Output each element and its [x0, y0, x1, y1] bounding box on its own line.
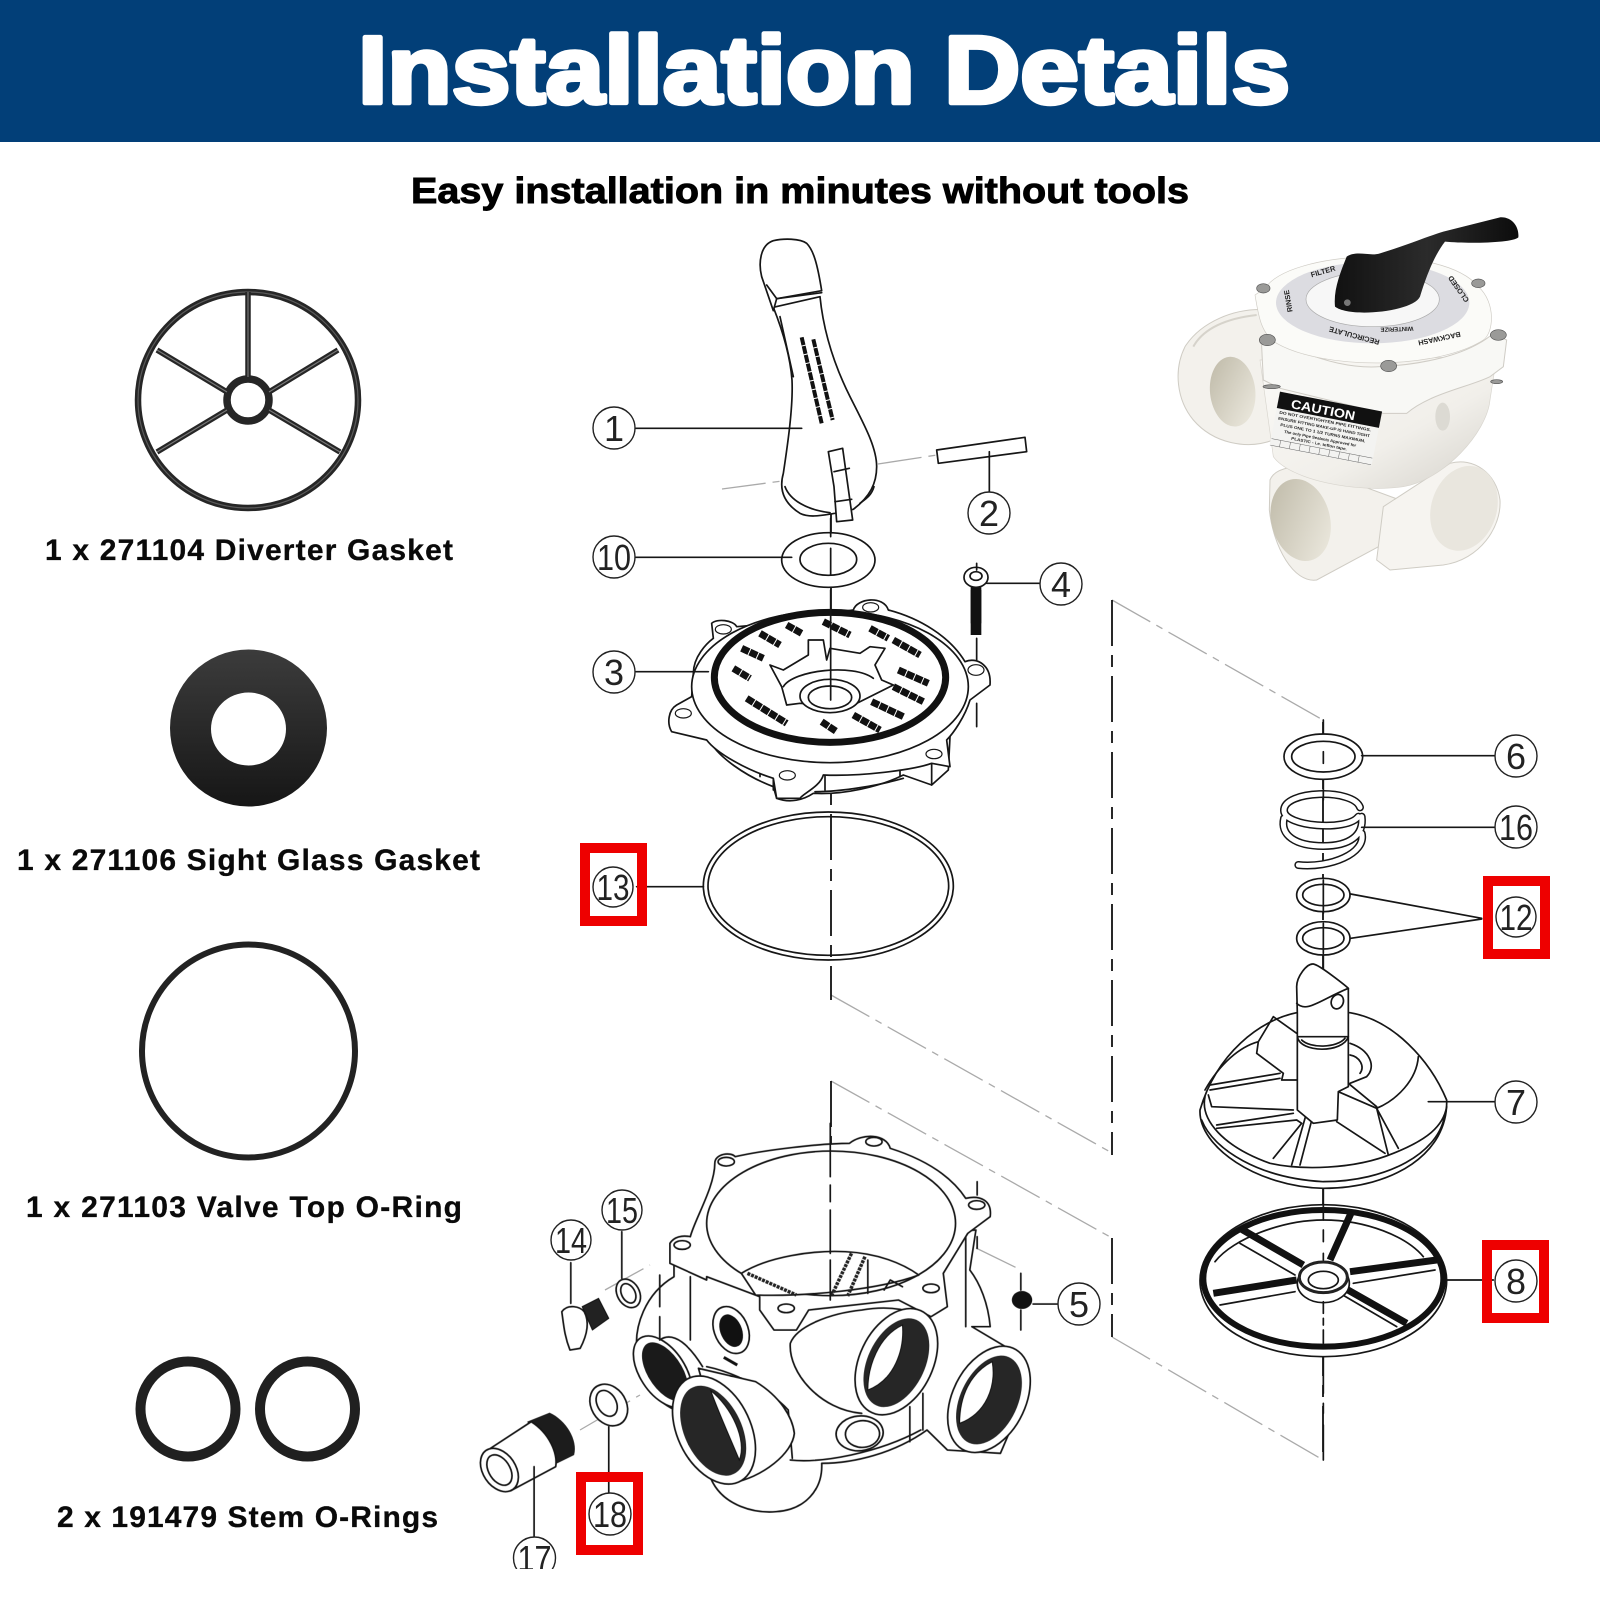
callout 5 [1058, 1283, 1100, 1325]
panel: included parts [17, 292, 480, 1534]
callout 14: 14 [555, 1220, 587, 1261]
part: nut 5 [1012, 1273, 1058, 1330]
dial labels: FILTER [1310, 263, 1337, 279]
caution sticker: PLUS ONE TO 1 1/2 TURNS MAXIMUM. [1280, 422, 1366, 444]
callout 6 [1495, 735, 1537, 777]
part: washer 15 [612, 1276, 645, 1310]
label: diverter gasket: 1 x 271104 Diverter Gasket [45, 534, 453, 567]
drain plug [831, 1412, 888, 1455]
callout 18: 18 [593, 1494, 627, 1535]
caution sticker: CAUTION [1290, 397, 1356, 423]
part: nipple 17 [473, 1413, 575, 1537]
main body [1260, 357, 1497, 488]
caution sticker: ENSURE FITTING MAKE-UP IS HAND TIGHT [1278, 416, 1371, 438]
callout 2: 2 [979, 493, 999, 534]
dial labels [1282, 263, 1471, 347]
callout 16: 16 [1499, 807, 1533, 848]
callout 5: 5 [1069, 1284, 1089, 1325]
callout 8: 8 [1506, 1261, 1526, 1302]
control handle [1335, 217, 1518, 313]
lid [1255, 257, 1491, 363]
caution sticker: PLASTIC - i.e. teflon tape. [1291, 436, 1347, 451]
subtitle: Easy installation in minutes without tools [411, 170, 1189, 211]
callout 3 [593, 651, 635, 693]
part: pin [937, 437, 1027, 463]
part drawings upper assembly [636, 239, 1040, 623]
caution sticker: DO NOT OVERTIGHTEN PIPE FITTINGS. [1279, 410, 1372, 432]
part: handle [760, 239, 877, 522]
part: lower valve body [473, 1123, 1058, 1537]
front port [657, 1367, 794, 1493]
callout 17 [505, 1537, 565, 1587]
left port [1178, 310, 1273, 444]
red highlight boxes [581, 848, 1545, 1550]
callout 7: 7 [1506, 1082, 1526, 1123]
photo: multiport valve [1178, 217, 1518, 580]
callout 8 [1495, 1260, 1537, 1302]
dial labels: RINSE [1282, 289, 1295, 313]
leader line [636, 671, 708, 673]
callout 1: 1 [604, 408, 624, 449]
callout 10: 10 [597, 537, 631, 578]
caution sticker: The only Pipe Sealants Approved for [1284, 429, 1357, 448]
label: sight glass gasket: 1 x 271106 Sight Glass Gasket [17, 844, 480, 877]
part: o-ring 13 [637, 812, 953, 960]
back left port [621, 1329, 704, 1415]
part: rotor gasket 8 [1200, 1188, 1493, 1460]
part 3: valve top [636, 590, 990, 960]
caution sticker [1270, 392, 1382, 465]
right port [932, 1338, 1045, 1461]
dial labels: BACKWASH [1417, 330, 1461, 347]
part: diverter 7 [1200, 964, 1495, 1188]
part: washer 18 [584, 1380, 634, 1493]
part: o-rings 12 [1297, 878, 1482, 955]
small side port [707, 1303, 755, 1365]
header banner [0, 0, 1600, 142]
part: plug 14 [562, 1232, 622, 1350]
part: screw 4 [964, 563, 988, 623]
callout 3: 3 [604, 652, 624, 693]
label: valve top o-ring: 1 x 271103 Valve Top O-Ring [26, 1191, 462, 1224]
part: o-ring 6 [1284, 734, 1495, 779]
callout 6: 6 [1506, 736, 1526, 777]
callout 17: 17 [518, 1538, 552, 1579]
callout 2 [968, 492, 1010, 534]
title: Installation Details [358, 17, 1290, 124]
collar [1262, 333, 1507, 413]
label: stem o-rings: 2 x 191479 Stem O-Rings [57, 1501, 438, 1534]
lower ports [1262, 457, 1508, 580]
center port [840, 1300, 953, 1423]
part: washer 10 [782, 518, 875, 587]
callout 4 [1040, 563, 1082, 605]
dial labels: CLOSED [1446, 274, 1471, 304]
icon: diverter gasket [138, 292, 358, 508]
part: spring 16 [1283, 794, 1495, 865]
number callouts [505, 407, 1537, 1587]
exploded view guide lines [580, 455, 1323, 1460]
dial labels: RECIRCULATE [1328, 325, 1381, 347]
callout 7 [1495, 1081, 1537, 1123]
dial labels: WINTERIZE [1380, 325, 1413, 332]
callout 12: 12 [1500, 897, 1532, 938]
icon: sight glass gasket [170, 650, 327, 806]
callout 4: 4 [1051, 564, 1071, 605]
screws [1257, 279, 1506, 389]
icon: valve top o-ring [142, 944, 355, 1158]
callout 13: 13 [596, 867, 630, 908]
callout 15: 15 [606, 1190, 638, 1231]
icon: stem o-rings [140, 1362, 355, 1456]
leader lines [636, 428, 1040, 583]
callout 1 [593, 407, 635, 449]
axis segments [1322, 720, 1324, 978]
part drawings right stack [1200, 720, 1495, 1188]
